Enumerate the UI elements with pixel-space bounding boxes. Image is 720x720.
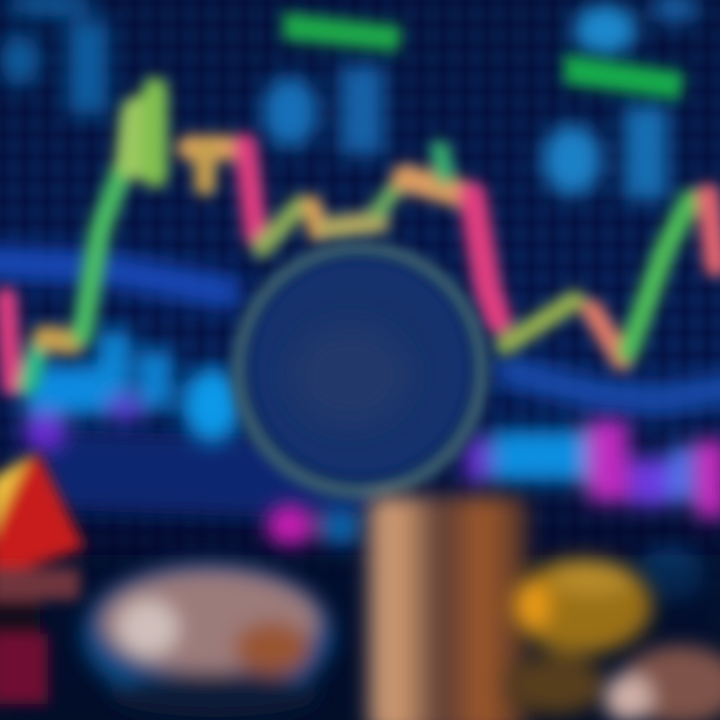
dark lower table	[0, 555, 720, 720]
pale coin at bottom right	[604, 645, 720, 720]
red wedge	[0, 452, 85, 704]
green top bars	[283, 12, 684, 100]
gold coins	[505, 558, 652, 715]
coin face	[252, 260, 468, 476]
bowl	[82, 561, 334, 717]
coin	[238, 248, 482, 492]
lower cyan and magenta volume blobs	[23, 330, 720, 601]
blue candle blocks	[0, 0, 699, 200]
blue bands	[0, 262, 720, 480]
coin rim	[238, 248, 482, 492]
coin stack	[368, 496, 528, 720]
coin emblem	[290, 323, 410, 427]
line chart	[6, 90, 716, 385]
